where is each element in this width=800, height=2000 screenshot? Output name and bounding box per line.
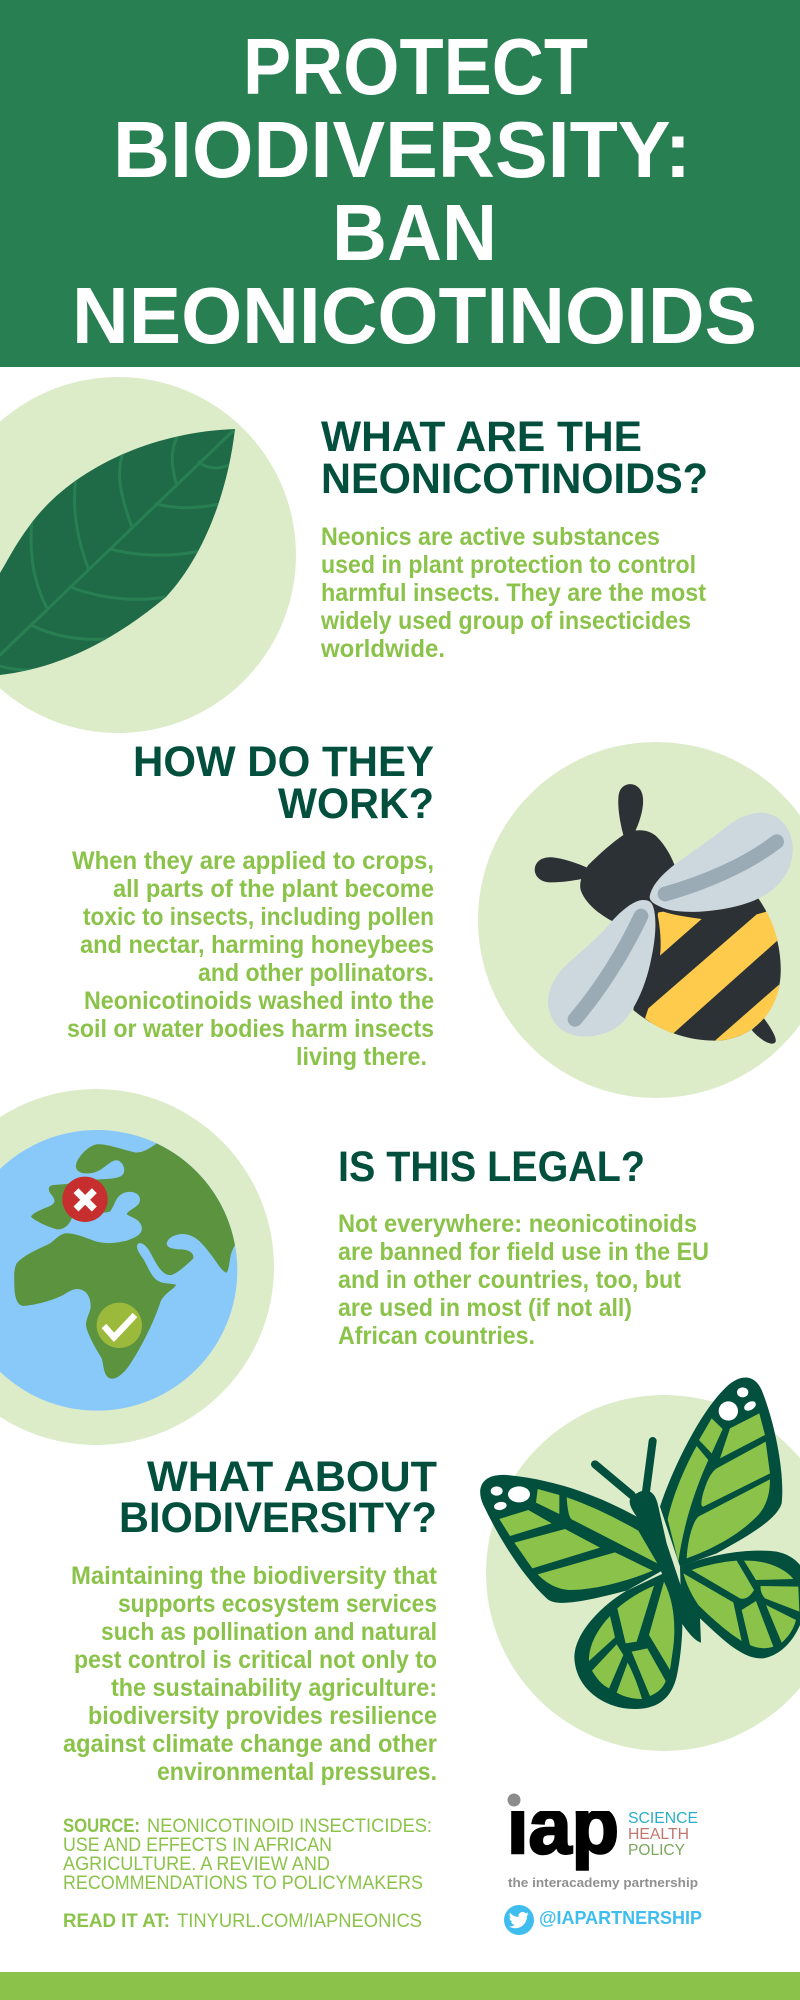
body text <box>338 1210 709 1350</box>
heading <box>119 1453 437 1542</box>
body text: are banned for field use in the EU <box>338 1238 709 1266</box>
body text: pest control is critical not only to <box>74 1646 437 1674</box>
source text: SOURCE: <box>63 1816 140 1837</box>
source text <box>63 1816 432 1932</box>
title: BIODIVERSITY: <box>113 105 691 194</box>
body text: worldwide. <box>320 635 445 663</box>
body text <box>320 523 707 663</box>
icon: red cross <box>62 1177 108 1222</box>
body text: soil or water bodies harm insects <box>67 1015 434 1043</box>
heading <box>133 738 434 828</box>
body text: living there. <box>296 1043 427 1071</box>
heading <box>321 413 708 503</box>
panel: is this legal <box>0 1089 709 1445</box>
panel: what about biodiversity <box>63 1377 800 1786</box>
body text: and in other countries, too, but <box>338 1266 682 1294</box>
body text: supports ecosystem services <box>118 1590 437 1618</box>
body text: When they are applied to crops, <box>72 847 434 875</box>
header banner <box>0 0 800 367</box>
icon: green check <box>97 1303 142 1348</box>
heading: NEONICOTINOIDS? <box>321 455 708 503</box>
heading: WORK? <box>278 780 434 828</box>
panel: what are the neonicotinoids <box>0 377 708 733</box>
body text: used in plant protection to control <box>321 551 696 579</box>
body text <box>63 1562 438 1786</box>
footer bar <box>0 1972 800 2000</box>
title: BAN <box>332 188 497 277</box>
source text: USE AND EFFECTS IN AFRICAN <box>63 1835 332 1856</box>
logo: iap the interacademy partnership: POLICY <box>628 1842 685 1859</box>
body text: toxic to insects, including pollen <box>83 903 434 931</box>
title <box>72 22 757 360</box>
heading: WHAT ARE THE <box>321 413 642 461</box>
source text: RECOMMENDATIONS TO POLICYMAKERS <box>63 1873 423 1894</box>
body text <box>67 847 434 1071</box>
heading: BIODIVERSITY? <box>119 1494 437 1542</box>
logo: iap the interacademy partnership: HEALTH <box>628 1826 689 1843</box>
body text: against climate change and other <box>63 1730 437 1758</box>
twitter handle: @IAPARTNERSHIP <box>539 1908 702 1928</box>
heading: HOW DO THEY <box>133 738 434 786</box>
logo: iap the interacademy partnership <box>508 1794 698 1890</box>
body text: harmful insects. They are the most <box>321 579 707 607</box>
panel: how do they work <box>67 738 800 1098</box>
body text: and nectar, harming honeybees <box>80 931 434 959</box>
body text: widely used group of insecticides <box>320 607 691 635</box>
body text: environmental pressures. <box>157 1758 437 1786</box>
source text: TINYURL.COM/IAPNEONICS <box>177 1911 422 1932</box>
icon: bee in circle <box>478 742 800 1098</box>
body text: Neonicotinoids washed into the <box>84 987 434 1015</box>
icon: globe in circle <box>0 1089 274 1445</box>
title: PROTECT <box>243 22 588 111</box>
body text: such as pollination and natural <box>101 1618 437 1646</box>
twitter handle <box>504 1905 702 1935</box>
body text: the sustainability agriculture: <box>111 1674 437 1702</box>
source text: AGRICULTURE. A REVIEW AND <box>63 1854 330 1875</box>
body text: biodiversity provides resilience <box>88 1702 437 1730</box>
heading: IS THIS LEGAL? <box>338 1143 645 1191</box>
body text: are used in most (if not all) <box>338 1294 632 1322</box>
icon: butterfly in circle <box>480 1377 800 1751</box>
body text: African countries. <box>338 1322 535 1350</box>
title: NEONICOTINOIDS <box>72 271 757 360</box>
source text: NEONICOTINOID INSECTICIDES: <box>147 1816 432 1837</box>
body text: Neonics are active substances <box>321 523 660 551</box>
logo: iap the interacademy partnership: SCIENCE <box>628 1810 698 1827</box>
logo: iap the interacademy partnership: the interacademy partnership <box>508 1875 698 1890</box>
body text: and other pollinators. <box>198 959 434 987</box>
heading: WHAT ABOUT <box>147 1453 437 1501</box>
source text: READ IT AT: <box>63 1911 170 1932</box>
body text: Maintaining the biodiversity that <box>71 1562 438 1590</box>
logo: iap the interacademy partnership: iap <box>507 1781 619 1870</box>
icon: leaf in circle <box>0 377 296 733</box>
body text: all parts of the plant become <box>113 875 434 903</box>
body text: Not everywhere: neonicotinoids <box>338 1210 697 1238</box>
